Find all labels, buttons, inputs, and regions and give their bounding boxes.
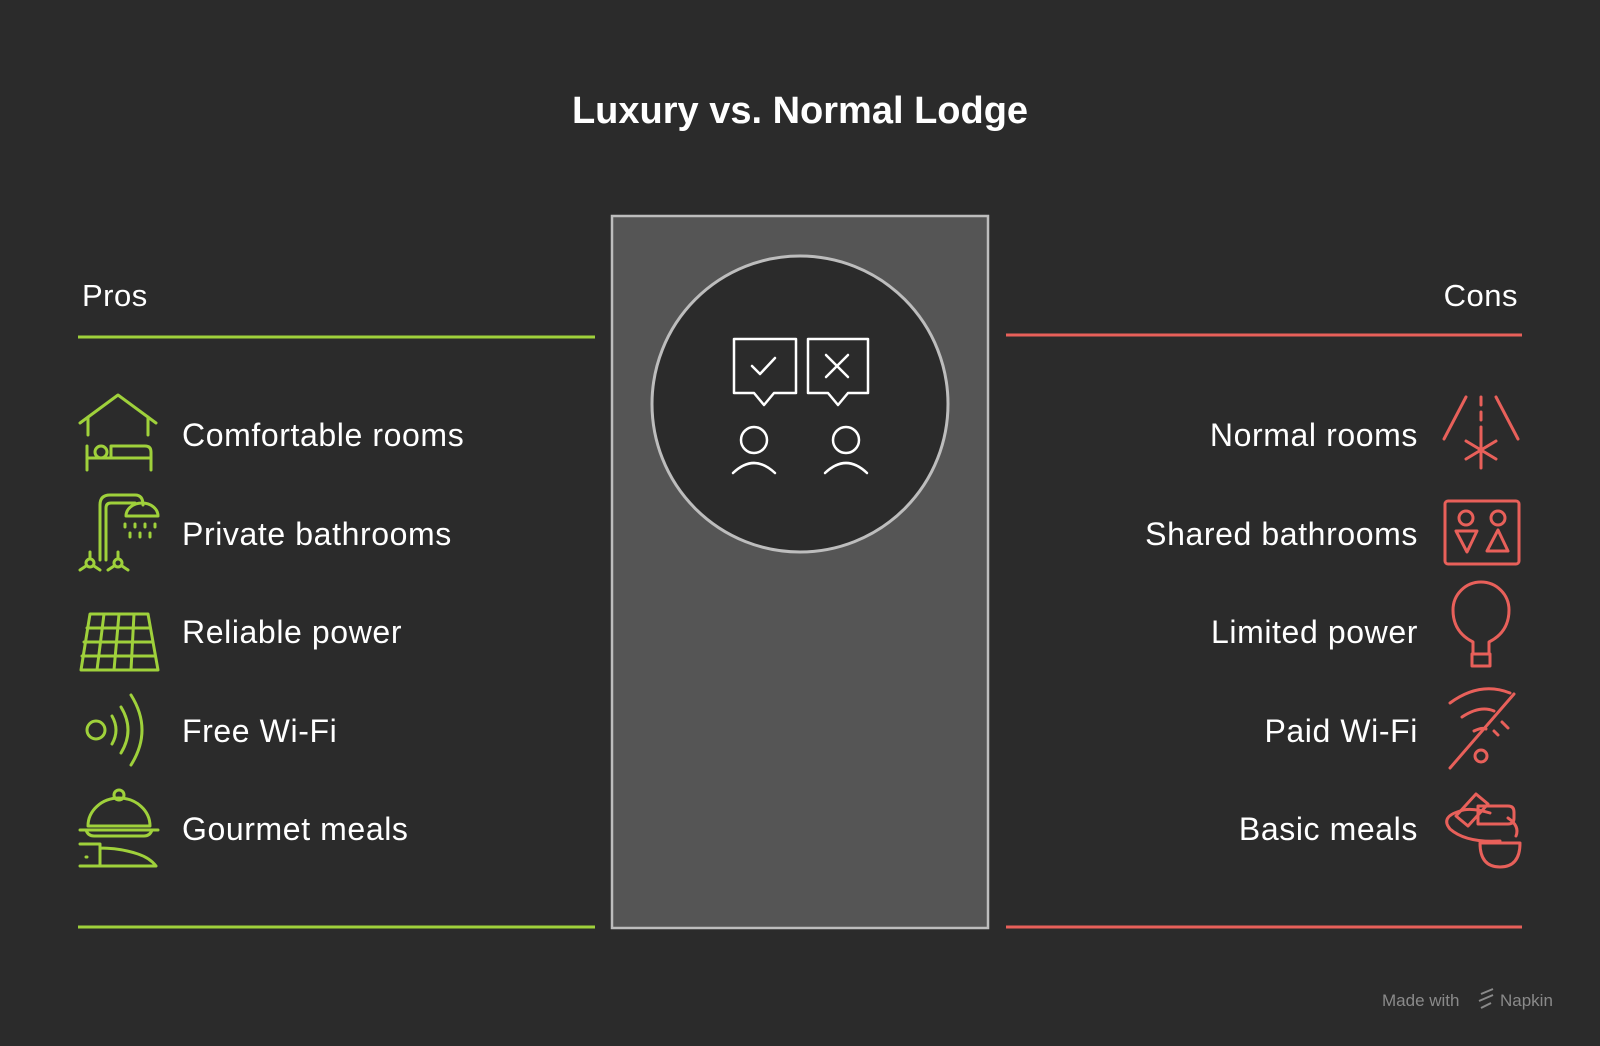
icon: shared bathrooms [1445, 501, 1519, 564]
footer: made with napkin [1382, 989, 1553, 1010]
text items: pros: Comfortable rooms [182, 417, 464, 453]
icon: wifi off [1450, 689, 1514, 768]
panel: pros [78, 278, 595, 927]
text items: cons: Paid Wi-Fi [1264, 713, 1418, 749]
icon: solar panel [81, 614, 158, 670]
icon: pros and cons people [652, 256, 948, 552]
text items: cons: Normal rooms [1210, 417, 1418, 453]
heading: Cons: Cons [1444, 278, 1518, 313]
icon: basic meals [1447, 794, 1520, 867]
text items: cons: Limited power [1211, 614, 1418, 650]
text items: cons: Basic meals [1239, 811, 1418, 847]
title: Luxury vs. Normal Lodge [572, 90, 1028, 132]
icon: shower [80, 495, 158, 570]
icon: normal rooms [1444, 397, 1518, 468]
footer: made with napkin: Napkin [1500, 991, 1553, 1010]
icon: gourmet meals [80, 790, 158, 866]
text items: cons: Shared bathrooms [1145, 516, 1418, 552]
text items: pros: Gourmet meals [182, 811, 409, 847]
center panel [612, 216, 988, 928]
text items: cons [1145, 417, 1418, 847]
panel: cons [1006, 278, 1522, 927]
icon: bulb [1453, 582, 1509, 666]
text items: pros: Reliable power [182, 614, 402, 650]
icon: house bed [80, 395, 156, 470]
heading: Pros: Pros [82, 278, 148, 313]
footer: made with napkin: Made with [1382, 991, 1459, 1010]
text items: pros [182, 417, 464, 847]
text items: pros: Free Wi-Fi [182, 713, 337, 749]
icon: wifi signal [87, 695, 142, 765]
text items: pros: Private bathrooms [182, 516, 452, 552]
